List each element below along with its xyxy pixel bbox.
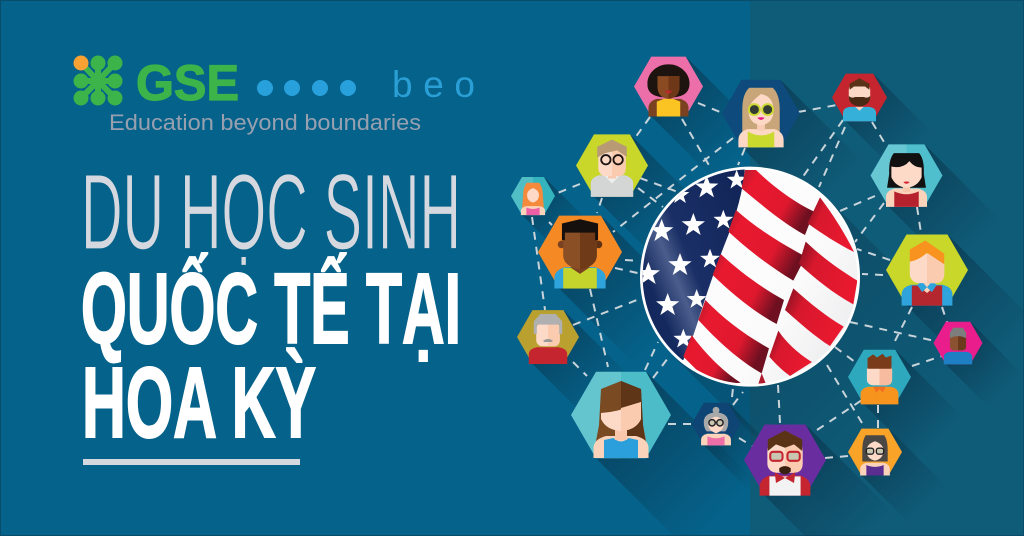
title line 3: HOA KỲ — [82, 347, 316, 459]
canton — [642, 170, 745, 360]
hexagon: man with orange hair, yellow-green — [886, 234, 968, 306]
logo dots — [257, 80, 356, 96]
title line 2: QUỐC TẾ TẠI — [81, 253, 461, 365]
stars — [637, 170, 747, 347]
hexagon: blonde woman with sunglasses, navy — [722, 80, 800, 147]
hexagon: dark-skinned man, magenta — [934, 322, 982, 364]
hexagon: old man with moustache, olive — [517, 310, 579, 364]
hexagon: grandmother, navy — [692, 403, 740, 445]
title line 1: DU HỌC SINH — [81, 151, 461, 272]
hexagon: dark-skinned man, orange — [538, 216, 622, 289]
hexagon: girl with orange hair, teal — [511, 177, 555, 215]
dashed network connections — [532, 103, 947, 458]
logo: GSE — [74, 55, 475, 135]
white stripes base — [765, 241, 857, 382]
hexagon: woman with black hair, light teal — [870, 144, 942, 207]
long shadows — [522, 57, 1024, 536]
hexagon: bearded man, red — [832, 74, 887, 121]
hexagon: woman with long brown hair, light teal — [571, 372, 671, 458]
hexagon: man with red glasses and bow tie, purple — [744, 424, 826, 496]
hexagon: man with round glasses, lime — [576, 134, 648, 197]
hexagon: woman with glasses, orange — [848, 429, 902, 475]
tagline: Education beyond boundaries — [109, 110, 421, 135]
globe with American flag — [640, 166, 860, 387]
hexagon: woman with afro, pink — [634, 57, 703, 117]
title underline — [83, 459, 300, 465]
partner name: beo — [392, 64, 475, 105]
logo mark — [74, 56, 122, 106]
logo wordmark: GSE — [136, 55, 239, 111]
title — [81, 151, 461, 465]
red stripes — [683, 170, 857, 387]
hexagon: boy with spiky hair, teal — [848, 350, 911, 404]
